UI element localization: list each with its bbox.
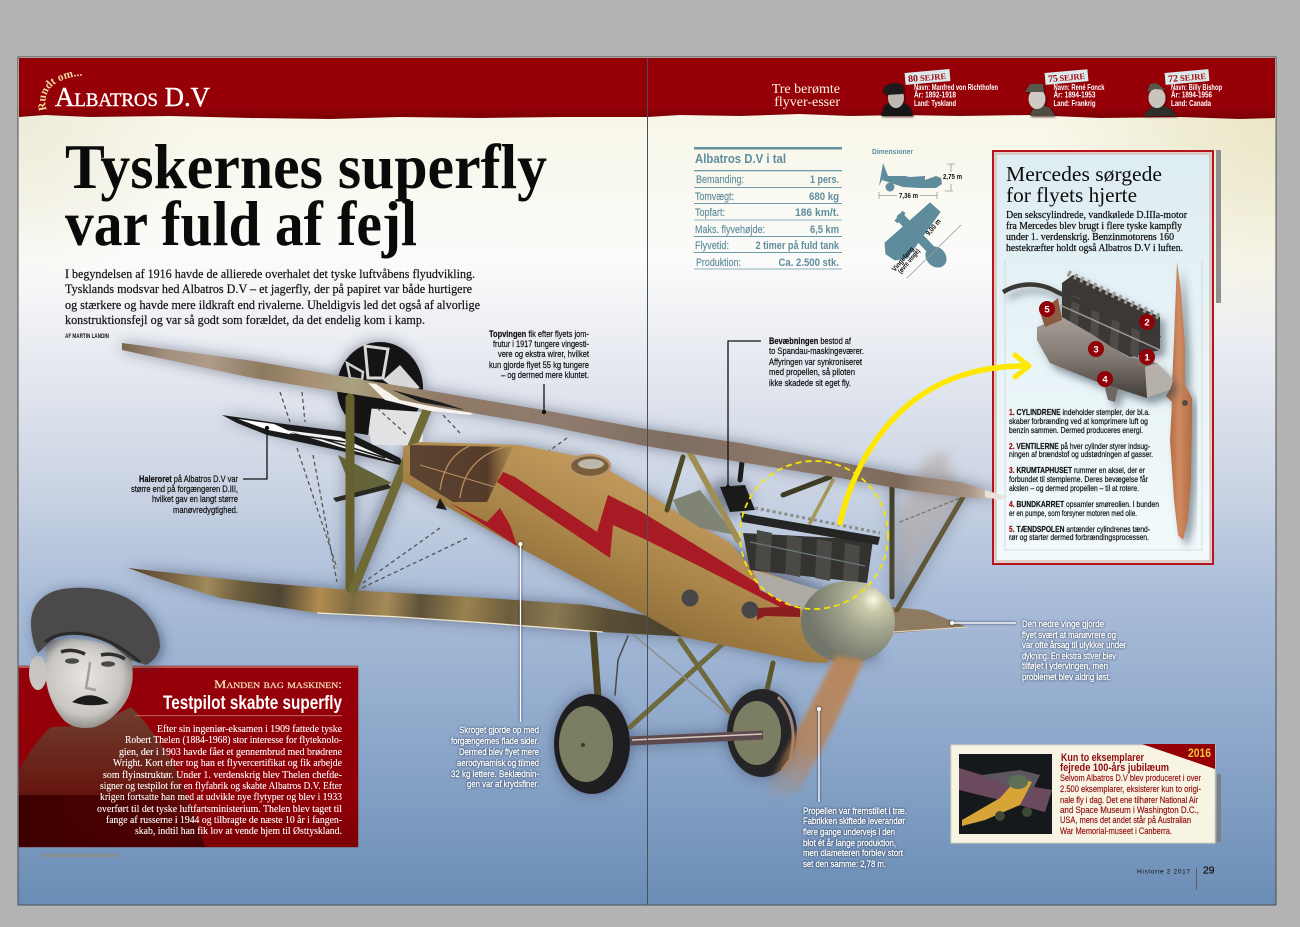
callout: Skroget: forgængernes flade sider. — [451, 736, 539, 746]
engine block — [740, 508, 880, 583]
tail rudder with iron cross — [337, 342, 423, 445]
valve gear — [1068, 273, 1162, 318]
dimensions diagram: Dimensioner — [872, 147, 913, 156]
engine number badges: 2 — [1144, 318, 1150, 328]
callout: Bevæbningen: med propellen, så piloten — [769, 367, 855, 377]
exhaust bosses — [682, 590, 758, 618]
panel body text: USA, mens det andet står på Australian — [1060, 815, 1191, 826]
height dimension — [945, 164, 955, 191]
stats table: Albatros D.V i tal: Ca. 2.500 stk. — [778, 257, 839, 269]
fuselage — [403, 442, 845, 663]
panel heading: Mercedes sørgede — [1006, 162, 1162, 186]
stats table: Albatros D.V i tal: Flyvetid: — [695, 240, 729, 252]
inner frame — [1005, 260, 1202, 550]
grey bar under panel — [43, 854, 117, 857]
red corner — [1142, 744, 1215, 769]
lightning stripe — [497, 472, 800, 617]
ace facts: Bishop: Navn: Billy Bishop — [1171, 82, 1222, 92]
callout: Bevæbningen: Affyringen var synkroniseret — [769, 357, 862, 367]
engine number badges: 1 — [1144, 352, 1150, 364]
callout: Haleroret: hvilket gav en langt større — [152, 494, 238, 504]
main title — [65, 131, 547, 259]
callout: Topvingen: kun gjorde flyet 55 kg tungere — [489, 360, 589, 370]
stats table: Albatros D.V i tal: Albatros D.V i tal — [695, 151, 786, 166]
ace facts: Bishop: År: 1894-1956 — [1171, 90, 1212, 100]
interplane struts left — [350, 398, 427, 590]
intro text: konstruktionsfejl og var så godt som forældet, da det endelig kom i kamp. — [65, 312, 425, 327]
panel background — [951, 745, 1215, 843]
stats table: Albatros D.V i tal: Maks. flyvehøjde: — [695, 224, 765, 236]
stats table: Albatros D.V i tal: 1 pers. — [810, 174, 839, 186]
panel: Mercedes engine — [993, 150, 1221, 564]
header title: Rundt om... Albatros D.V: Albatros D.V — [55, 82, 210, 112]
callout: Den nedre vinge: tilføjet i ydervingen, men — [1022, 661, 1108, 671]
panel body text: overført til det tyske luftfartsministerium. Thelen blev taget til — [97, 804, 342, 815]
stats table: Albatros D.V i tal: Topfart: — [695, 207, 725, 219]
ace badge: 75 sejre: 75 SEJRE — [1048, 71, 1086, 85]
ace facts: Fonck: Navn: René Fonck — [1054, 82, 1105, 92]
callout: Bevæbningen — [726, 336, 864, 489]
top silhouette — [885, 203, 950, 271]
dimensions diagram: 9,00 m — [924, 217, 943, 237]
callout: Bevæbningen: to Spandau-maskingeværer. — [769, 346, 864, 356]
callout: Propellen: set den samme: 2,78 m. — [803, 859, 886, 869]
byline: AF MARTIN LANDIN — [65, 333, 109, 340]
callout: Propellen: Fabrikken skiftede leverandør — [803, 816, 905, 826]
panel grey shadow bar — [1216, 150, 1221, 303]
callout: Propellen: blot ét år lange produktion, — [803, 838, 896, 848]
panel intro: under 1. verdenskrig. Benzinmotorens 160 — [1006, 232, 1174, 243]
callout: Skroget: 32 kg lettere. Beklædnin- — [451, 769, 539, 779]
engine parts list: ningen af brændstof og udstødningen af gasser. — [1009, 449, 1153, 459]
ace facts: Fonck: Land: Frankrig — [1054, 98, 1096, 108]
callout: Topvingen: Topvingen fik efter flyets jom- — [489, 329, 589, 339]
nose spinner — [801, 581, 895, 663]
axle highlight — [632, 734, 762, 740]
bracing wires left — [280, 392, 567, 588]
callout: Skroget: Dermed blev flyet mere — [459, 747, 539, 757]
dimensions diagram — [872, 147, 962, 278]
cockpit ring — [570, 455, 610, 477]
panel body text: Selvom Albatros D.V blev produceret i over — [1060, 773, 1201, 784]
portrait of Robert Thelen — [19, 588, 209, 847]
callout: Skroget: gen var af krydsfiner. — [467, 779, 539, 789]
panel body text: gien, der i 1903 havde fået et gennembrud med brødrene — [119, 747, 343, 758]
panel heading — [1006, 162, 1162, 207]
water pipe — [1003, 284, 1160, 338]
stats table: Albatros D.V i tal: 2 timer på fuld tank — [756, 240, 840, 252]
blurred propeller, lower blade — [765, 655, 864, 805]
callout: Skroget: Skroget gjorde op med — [459, 725, 539, 735]
callout: Den nedre vinge: var ofte årsag til ulykker under — [1022, 640, 1126, 650]
propeller — [1166, 262, 1192, 540]
ace facts: Bishop — [1171, 82, 1222, 108]
callout: Propellen — [803, 707, 907, 869]
callout: Bevæbningen: ikke skadede sit eget fly. — [769, 378, 851, 388]
upper wing — [122, 343, 1008, 500]
panel body text: signer og testpilot for en flyfabrik og skabte Albatros D.V. Efter — [100, 781, 343, 792]
heading: three aces: Tre berømte — [772, 82, 840, 97]
panel body text: som flyinstruktør. Under 1. verdenskrig blev Thelen chefde- — [103, 770, 342, 781]
callout: Topvingen — [489, 329, 589, 414]
ace badge: 80 sejre: 80 SEJRE — [908, 71, 947, 85]
engine highlight circle — [740, 461, 888, 609]
stats table: Albatros D.V i tal: 6,5 km — [810, 224, 839, 236]
panel shadow bar — [1217, 774, 1221, 842]
panel body text: fange af russerne i 1944 og tilbragte de næste 10 år i fangen- — [106, 815, 342, 826]
illustration: Albatros D.V biplane — [122, 342, 1008, 794]
stats table: Albatros D.V i tal: 680 kg — [809, 191, 839, 203]
panel intro: Den sekscylindrede, vandkølede D.IIIa-motor — [1006, 210, 1187, 221]
lightning rear tip — [450, 503, 517, 546]
ace badge: 72 sejre: 72 SEJRE — [1168, 71, 1207, 85]
engine parts list: skaber forbrænding ved at komprimere luft og — [1009, 416, 1148, 426]
header band — [19, 58, 1275, 119]
intro text: Tysklands modsvar hed Albatros D.V – et jagerfly, der på papiret var både hurtigere — [65, 281, 472, 296]
tail plane — [222, 415, 404, 502]
ace facts: Richthofen: Land: Tyskland — [914, 98, 956, 108]
callout: Haleroret — [131, 426, 269, 515]
panel body text: Wright. Kort efter tog han et flyvercertifikat og fik arbejde — [113, 758, 343, 769]
corner year: 2016 — [1188, 748, 1211, 760]
callout: Den nedre vinge: Den nedre vinge gjorde — [1022, 619, 1104, 629]
rear accessory — [1040, 298, 1062, 327]
callout: Topvingen: frutur i 1917 tungere vingesti- — [493, 339, 589, 349]
cockpit decking — [673, 490, 735, 535]
blurred propeller, upper blade — [895, 450, 958, 595]
ace portrait: Bishop — [1143, 83, 1177, 116]
panel body text — [1060, 773, 1201, 837]
engine illustration — [1003, 273, 1173, 402]
machine gun mount — [720, 485, 755, 512]
panel body text: and Space Museum i Washington D.C., — [1060, 805, 1199, 816]
wingspan dimension — [907, 225, 961, 278]
header: famous aces — [772, 69, 1222, 116]
panel inner edge — [996, 154, 1210, 562]
ace facts: Richthofen: Navn: Manfred von Richthofen — [914, 82, 998, 92]
page footer — [1137, 866, 1215, 890]
callout: Skroget — [451, 542, 539, 789]
engine number badges: 4 — [1102, 374, 1108, 386]
callout: Propellen: men diameteren forblev stort — [803, 848, 903, 858]
panel frame — [993, 151, 1213, 564]
heading: three aces: flyver-esser — [774, 95, 840, 110]
ace facts: Fonck — [1054, 82, 1105, 108]
cylinders — [1062, 275, 1160, 357]
dimensions diagram: (øvre vinge) — [897, 248, 922, 275]
callout: Den nedre vinge: flyet svært at manøvrere og — [1022, 630, 1116, 640]
panel body text: nale fly i dag. Det ene tilhører National Air — [1060, 795, 1198, 806]
engine parts list: er en pumpe, som forsyner motoren med olie. — [1009, 508, 1137, 518]
engine parts list: akslen – og dermed propellen – til at rotere. — [1009, 483, 1139, 493]
engine parts list: 1. CYLINDRENE indeholder stempler, der bl.a. — [1009, 407, 1150, 417]
engine parts list: 3. KRUMTAPHUSET rummer en aksel, der er — [1009, 465, 1145, 475]
panel body text: War Memorial-museet i Canberra. — [1060, 826, 1172, 837]
main title: Tyskernes superfly — [65, 131, 547, 202]
header title: Rundt om... Albatros D.V — [38, 72, 210, 112]
engine number badges — [1039, 301, 1155, 387]
callout: Den nedre vinge — [950, 619, 1126, 682]
ace portrait: Fonck — [1025, 84, 1055, 116]
stats table: Albatros D.V i tal: Bemanding: — [696, 174, 744, 186]
engine parts list: forbundet til stemplerne. Deres bevægelse får — [1009, 474, 1148, 484]
stats table: Albatros D.V i tal: Produktion: — [696, 257, 741, 269]
engine number badges: 5 — [1044, 304, 1050, 316]
right lower wing highlight — [893, 627, 967, 632]
header title: Rundt om... Albatros D.V: Rundt om... — [38, 72, 82, 112]
main title: var fuld af fejl — [65, 188, 417, 259]
callout: Topvingen: – og dermed mere kluntet. — [501, 370, 589, 380]
fuselage rear wood frame — [410, 445, 513, 510]
panel heading: for flyets hjerte — [1006, 183, 1137, 207]
heading: three aces — [772, 82, 840, 110]
page footer: 29 — [1203, 866, 1215, 876]
crankcase — [1037, 317, 1173, 398]
panel heading: Testpilot skabte superfly — [163, 693, 342, 714]
silver engine cowl — [753, 570, 843, 610]
callout: Den nedre vinge: dykning. En ekstra stiver blev — [1022, 651, 1116, 661]
engine parts list: 4. BUNDKARRET opsamler smøreolien. I bunden — [1009, 499, 1159, 509]
rail — [1060, 305, 1160, 350]
panel heading — [1060, 752, 1169, 774]
callout: Den nedre vinge: problemet blev aldrig løst. — [1022, 672, 1111, 682]
ace portrait: Richthofen — [881, 83, 913, 116]
landing gear — [593, 630, 773, 735]
panel: 2016 anniversary — [951, 744, 1221, 843]
dimensions diagram: 7,36 m — [899, 191, 918, 200]
callout: Bevæbningen: Bevæbningen bestod af — [769, 336, 851, 346]
museum photo — [959, 754, 1052, 834]
yellow arrow to engine panel — [840, 355, 1029, 523]
stats table: Albatros D.V i tal: Tomvægt: — [695, 191, 734, 203]
sump — [1104, 384, 1118, 402]
intro text: I begyndelsen af 1916 havde de allierede overhalet det tyske luftvåbens flyudvikling. — [65, 266, 475, 281]
left wheel — [554, 694, 630, 794]
axle — [630, 735, 763, 741]
callout: Skroget: aerodynamisk og tilmed — [457, 758, 539, 768]
centre fold — [647, 58, 648, 905]
callout: Haleroret: Haleroret på Albatros D.V var — [139, 474, 238, 484]
engine parts list: benzin sammen. Dermed produceres energi. — [1009, 425, 1143, 435]
stats table: Albatros D.V i tal: 186 km/t. — [795, 207, 839, 219]
engine parts list: 5. TÆNDSPOLEN antænder cylindrenes tænd- — [1009, 524, 1150, 534]
lower wing, left span — [128, 568, 690, 637]
panel intro: hestekræfter holdt også Albatros D.V i luften. — [1006, 243, 1183, 254]
intro text — [65, 266, 480, 327]
panel intro: fra Mercedes blev brugt i flere tyske kampfly — [1006, 221, 1183, 232]
stats table: Albatros D.V i tal — [694, 147, 842, 270]
lower wing highlight — [317, 613, 603, 632]
cabane struts — [667, 453, 963, 610]
panel intro — [1006, 210, 1187, 254]
engine number badges: 3 — [1093, 344, 1099, 356]
callout: Haleroret: større end på forgængeren D.III, — [131, 484, 238, 494]
panel top highlight — [19, 666, 358, 668]
engine parts list: 2. VENTILERNE på hver cylinder styrer indsug- — [1009, 441, 1150, 451]
dimensions diagram: 2,75 m — [943, 172, 962, 181]
panel kicker: Manden bag maskinen: — [214, 679, 342, 691]
panel heading: Kun to eksemplarer — [1061, 752, 1145, 764]
red nose detail — [757, 606, 800, 620]
panel heading: fejrede 100-års jubilæum — [1060, 762, 1169, 774]
panel body text — [97, 724, 343, 837]
length dimension — [879, 192, 937, 199]
nose of crankcase — [1145, 363, 1173, 398]
dimensions diagram: Vingefang — [891, 246, 916, 273]
intro text: og stærkere og havde mere ildkraft end rivalerne. Uheldigvis led det også af alvorlige — [65, 297, 480, 312]
panel body text: krigen fortsatte han med at udvikle nye flytyper og blev i 1933 — [100, 792, 342, 803]
ace facts: Richthofen — [914, 82, 998, 108]
red panel background — [19, 666, 358, 847]
ace facts: Richthofen: År: 1892-1918 — [914, 90, 956, 100]
callout: Propellen: Propellen var fremstillet i træ. — [803, 806, 907, 816]
page footer: Historie 2 2017 — [1137, 868, 1190, 876]
panel body text: 2.500 eksemplarer, eksisterer kun to origi- — [1060, 784, 1201, 795]
panel body text: skab, indtil han fik lov at vende hjem til Østtyskland. — [135, 826, 342, 837]
panel body text: Robert Thelen (1884-1968) stor interesse for flyteknolo- — [125, 735, 342, 746]
lower wing, right tip — [880, 606, 967, 634]
side silhouette — [879, 163, 942, 192]
callout: Topvingen: vere og ekstra wirer, hvilket — [498, 349, 589, 359]
callout: Propellen: flere gange undervejs i den — [803, 827, 895, 837]
ace facts: Fonck: År: 1894-1953 — [1054, 90, 1096, 100]
soft shadow around the plane — [122, 342, 1008, 794]
panel body text: Efter sin ingeniør-eksamen i 1909 fattede tyske — [157, 724, 343, 735]
right wheel — [727, 689, 797, 777]
callout: Haleroret: manøvredygtighed. — [173, 505, 238, 515]
engine parts list: rør og starter dermed forbrændingsprocessen. — [1009, 532, 1149, 542]
panel: Testpilot — [19, 588, 358, 847]
panel rule — [135, 715, 342, 716]
engine parts list — [1009, 407, 1159, 542]
ace facts: Bishop: Land: Canada — [1171, 98, 1211, 108]
upper wing markings — [368, 383, 473, 415]
upper wing tip over panel — [985, 490, 1008, 500]
